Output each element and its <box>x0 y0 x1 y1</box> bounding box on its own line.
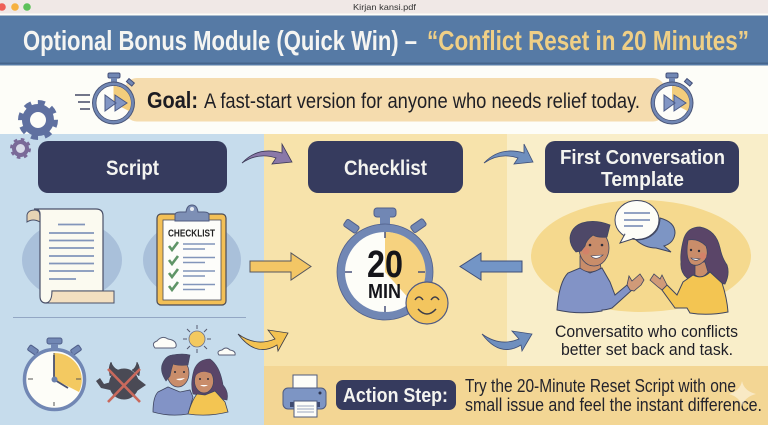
arrow: yellow curved <box>238 330 288 351</box>
panel: action step background <box>264 366 768 425</box>
icon: right fast stopwatch <box>650 73 694 124</box>
title banner: Optional Bonus Module (Quick Win) – <box>23 25 417 56</box>
arrow: yellow right <box>250 253 311 280</box>
woman <box>650 227 728 314</box>
panel: checklist column background <box>264 134 507 366</box>
heading: first conversation template: Template <box>601 169 684 191</box>
icon: crossed out conflict monster <box>96 362 146 402</box>
panel: conversation column background <box>507 134 768 366</box>
icon: smiley <box>406 282 448 324</box>
heading: checklist <box>308 141 463 193</box>
goal banner: A fast-start version for anyone who needs relief today. <box>204 90 640 113</box>
icon: checklist clipboard: CHECKLIST <box>168 228 215 240</box>
heading: script <box>38 141 227 193</box>
icon: 20 minute stopwatch: MIN <box>368 281 401 303</box>
panel: script column background <box>0 134 264 425</box>
text: action step details <box>465 376 762 415</box>
illustration: two people talking <box>531 200 751 314</box>
goal banner <box>125 78 665 122</box>
arrow: checklist to conversation <box>484 144 533 164</box>
title banner <box>0 16 768 66</box>
text: conversation caption: better set back and task. <box>561 340 733 359</box>
heading: first conversation template <box>545 141 739 193</box>
icon: sparkle <box>729 381 756 407</box>
heading: script: Script <box>106 157 159 180</box>
arrow: script to checklist <box>242 144 292 164</box>
heading: action step <box>336 380 456 410</box>
heading: first conversation template: First Conversation <box>560 147 725 169</box>
text: conversation caption: Conversatito who conflicts <box>555 322 738 341</box>
icon: clock with timer <box>24 338 84 410</box>
icon: script scroll <box>22 209 122 303</box>
window title bar <box>0 0 768 14</box>
icon: 20 minute stopwatch: 20 <box>367 244 403 286</box>
icon: printer <box>283 375 326 417</box>
illustration: happy couple <box>153 354 228 415</box>
icon: sun and clouds <box>153 325 235 355</box>
icon: blue speech bubble <box>636 218 675 252</box>
man <box>557 221 644 313</box>
arrow: blue left <box>460 253 522 280</box>
arrow: blue curved <box>482 331 532 351</box>
icon: white speech bubble <box>615 200 659 243</box>
icon: checklist clipboard <box>143 205 241 305</box>
divider <box>13 317 246 318</box>
window title bar: Kirjan kansi.pdf <box>353 2 417 12</box>
icon: left fast stopwatch <box>75 73 135 124</box>
heading: action step: Action Step: <box>343 385 448 407</box>
icon: 20 minute stopwatch <box>337 208 448 324</box>
icon: large gear <box>20 102 56 138</box>
text: conversation caption <box>555 322 738 359</box>
goal banner: Goal: <box>147 87 198 113</box>
heading: checklist: Checklist <box>344 157 427 180</box>
icon: small gear <box>12 140 30 158</box>
